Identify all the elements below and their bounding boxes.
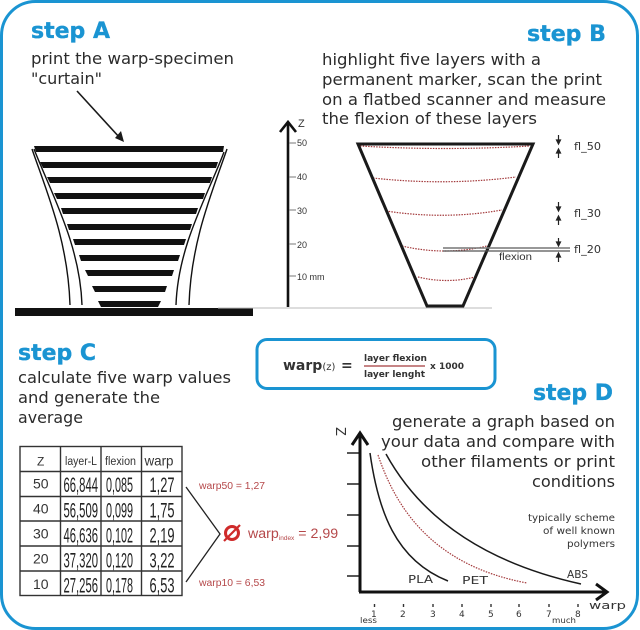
- z axis scale: Z: [298, 118, 305, 130]
- warp sample labels: [198, 481, 265, 589]
- heading: step C: step C: [18, 341, 96, 366]
- x axis ticks and labels: 1: [371, 610, 377, 620]
- warp sample labels: warp50 = 1,27: [198, 481, 265, 492]
- text: step C instruction: calculate five warp values: [18, 368, 231, 387]
- arrow: to curtain: [77, 91, 124, 142]
- formula box: x 1000: [430, 362, 464, 372]
- data table: 1,27: [150, 474, 174, 497]
- z axis scale: 40: [297, 172, 307, 182]
- panel: step C: [18, 341, 338, 598]
- flexion measure lines: [443, 248, 570, 263]
- icon: average symbol: [224, 525, 240, 541]
- data table: 10: [33, 576, 49, 592]
- data table: warp: [144, 452, 174, 468]
- line chart: [332, 427, 626, 625]
- data table: 3,22: [150, 550, 174, 572]
- text: step B instruction: highlight five layers with a: [322, 50, 541, 69]
- heading: step A: step A: [31, 19, 110, 44]
- measure labels: fl_20: [574, 243, 601, 256]
- warp index result: = 2,99: [294, 526, 338, 542]
- curve labels: PET: [462, 574, 488, 587]
- formula box: layer lenght: [364, 370, 426, 380]
- flexion measure lines: flexion: [499, 252, 532, 263]
- data table: 46,636: [64, 524, 98, 548]
- panel: step D: [332, 381, 626, 625]
- line chart: Z: [332, 427, 347, 436]
- data table: 66,844: [64, 474, 98, 497]
- formula box: =: [341, 358, 353, 374]
- curve: ABS: [386, 454, 581, 584]
- curve labels: PLA: [408, 573, 434, 586]
- specimen trapezoid with flexion layers: [358, 144, 533, 306]
- heading: step D: step D: [533, 381, 613, 406]
- text: step B instruction: the flexion of these layers: [322, 109, 537, 128]
- data table: 1,75: [150, 500, 174, 522]
- text: step D instruction: generate a graph based on: [392, 412, 615, 431]
- text: step C instruction: and generate the: [18, 388, 160, 407]
- text: step A instruction: [31, 49, 234, 88]
- z axis scale: 50: [297, 138, 307, 148]
- measure labels: [574, 140, 601, 256]
- text: step B instruction: permanent marker, scan the print: [322, 70, 602, 89]
- text: step D instruction: your data and compare with: [381, 432, 615, 451]
- bracket arrow: [186, 487, 220, 582]
- x axis ticks and labels: 7: [546, 610, 552, 620]
- data table: 0,178: [106, 574, 133, 598]
- data table: 30: [33, 526, 49, 542]
- data table: [20, 446, 182, 598]
- x axis ticks and labels: 3: [430, 610, 436, 620]
- x axis ticks and labels: much: [552, 616, 576, 625]
- curve labels: ABS: [567, 568, 588, 581]
- x axis ticks and labels: 6: [516, 610, 522, 620]
- data table: layer-L: [65, 456, 98, 468]
- text: step C instruction: average: [18, 408, 83, 427]
- text: step B instruction: on a flatbed scanner and measure: [322, 90, 606, 109]
- z axis scale: 10 mm: [297, 272, 325, 282]
- x axis ticks and labels: 2: [400, 610, 406, 620]
- note: typically scheme: [528, 513, 615, 550]
- text: step A instruction: "curtain": [31, 69, 102, 88]
- formula box: [257, 340, 495, 388]
- curve: PET: [378, 455, 527, 583]
- heading: step B: step B: [527, 22, 606, 47]
- data table: flexion: [105, 456, 136, 468]
- x axis ticks and labels: 5: [488, 610, 494, 620]
- x axis ticks and labels: 4: [459, 610, 465, 620]
- note: typically scheme: typically scheme: [528, 513, 615, 524]
- data table: 20: [33, 550, 49, 566]
- data table: 50: [33, 476, 49, 492]
- measure labels: fl_50: [574, 140, 601, 153]
- x axis ticks and labels: [360, 599, 626, 625]
- curve labels: [408, 568, 588, 587]
- formula box: layer flexion: [364, 354, 427, 364]
- data table: 27,256: [64, 574, 98, 598]
- x axis ticks and labels: less: [360, 616, 377, 625]
- data table: 37,320: [64, 550, 98, 572]
- curtain specimen: [32, 146, 227, 307]
- text: step A instruction: print the warp-specimen: [31, 49, 234, 68]
- x axis ticks and labels: 8: [575, 610, 581, 620]
- data table: 0,120: [106, 550, 133, 572]
- measure labels: fl_30: [574, 207, 601, 220]
- data table: 6,53: [150, 574, 174, 598]
- data table: 0,099: [106, 500, 133, 522]
- data table: 40: [33, 500, 49, 516]
- data table: 2,19: [150, 524, 174, 548]
- data table: 0,085: [106, 474, 133, 497]
- formula box: warp(z): [283, 358, 335, 374]
- text: step D instruction: [381, 412, 615, 491]
- warp sample labels: warp10 = 6,53: [198, 578, 265, 589]
- text: step C instruction: [18, 368, 231, 427]
- curve: PLA: [370, 453, 448, 581]
- text: step D instruction: other filaments or print: [421, 452, 615, 471]
- data table: 56,509: [64, 500, 98, 522]
- note: typically scheme: of well known: [543, 526, 615, 537]
- x axis ticks and labels: warp: [589, 599, 626, 612]
- warp index result: index: [279, 535, 295, 542]
- text: step B instruction: [322, 50, 606, 128]
- z axis scale: [280, 118, 325, 307]
- data table: Z: [37, 454, 44, 468]
- z axis scale: 20: [297, 240, 307, 250]
- build plate: [15, 308, 253, 316]
- warp index result: warp: [248, 526, 279, 542]
- data table: 0,102: [106, 524, 133, 548]
- z axis scale: 30: [297, 206, 307, 216]
- measure arrows: [556, 135, 560, 262]
- note: typically scheme: polymers: [567, 539, 615, 550]
- panel: step A: [15, 19, 492, 316]
- panel: step B: [322, 22, 606, 306]
- text: step D instruction: conditions: [532, 472, 615, 491]
